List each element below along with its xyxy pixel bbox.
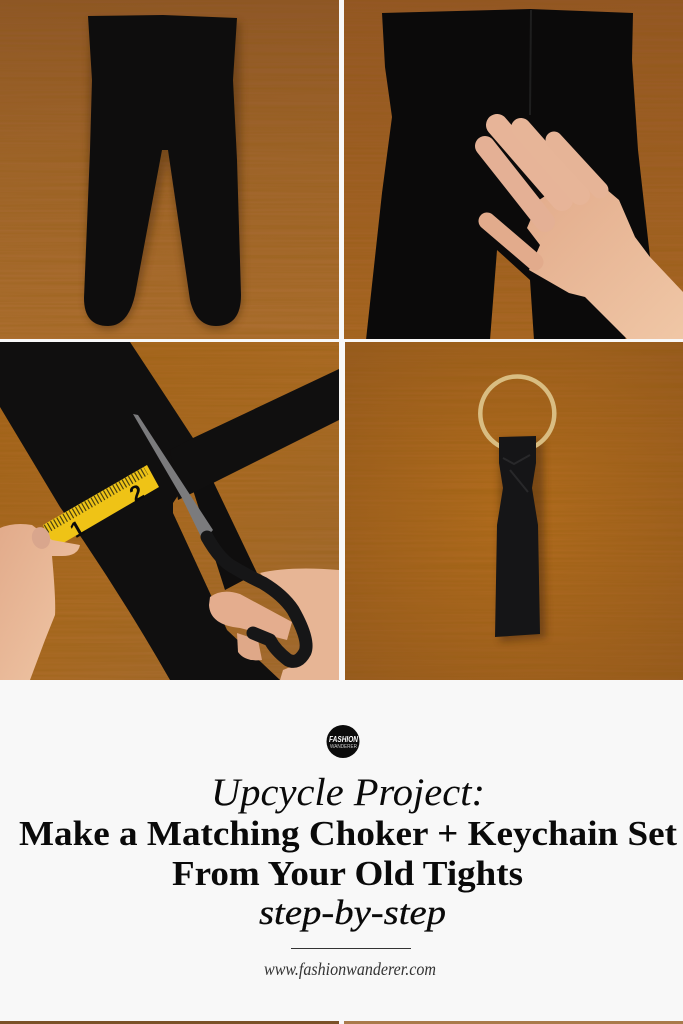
right hand palm — [260, 569, 339, 680]
title line: Make a Matching Choker + Keychain Set: Make a Matching Choker + Keychain Set — [19, 814, 677, 853]
website url: www.fashionwanderer.com — [264, 959, 436, 979]
second strip under scissors — [193, 481, 257, 590]
fabric fob — [495, 436, 540, 637]
pinky finger — [554, 140, 600, 190]
title line: From Your Old Tights: From Your Old Tights — [172, 854, 523, 893]
measuring tape — [43, 465, 159, 549]
left thumbnail — [32, 527, 50, 549]
panel: step 4 finished keychain — [345, 342, 683, 680]
thumb — [487, 221, 535, 262]
left hand fingers — [0, 524, 80, 680]
logo word wanderer: WANDERER — [330, 744, 357, 750]
bottom strip: next row preview right — [344, 1021, 683, 1024]
ring finger — [521, 128, 580, 195]
panel: step 2 hand smoothing tights — [344, 0, 683, 341]
bottom strip: next row preview left — [0, 1021, 339, 1024]
wide tights band — [0, 342, 280, 680]
right thumb — [209, 592, 292, 640]
gold ring — [480, 376, 554, 450]
middle finger — [497, 125, 562, 200]
index finger — [485, 146, 545, 222]
scissor blades — [133, 414, 213, 541]
fob knot fold — [503, 455, 530, 492]
panel: step 3 measuring and cutting — [0, 342, 339, 680]
tights waist and legs — [366, 9, 650, 340]
title block — [19, 771, 677, 932]
lower finger — [237, 633, 262, 660]
keychain shadow — [500, 440, 546, 642]
scissor handle — [207, 537, 306, 661]
tights silhouette — [84, 15, 241, 326]
divider — [291, 948, 411, 949]
title line: Upcycle Project: Upcycle Project: — [211, 771, 485, 814]
hand — [485, 125, 683, 341]
tape ticks — [46, 471, 146, 529]
palm and wrist — [527, 180, 683, 341]
left hand — [0, 524, 80, 680]
logo badge — [326, 725, 360, 758]
logo word fashion: FASHION — [329, 735, 358, 744]
tape number 2: 2 — [125, 479, 148, 507]
tape number 1: 1 — [66, 515, 89, 543]
center seam — [530, 10, 531, 115]
panel: step 1 flat tights — [0, 0, 339, 339]
subtitle: step-by-step: step-by-step — [259, 893, 446, 932]
cut strip — [170, 369, 339, 500]
